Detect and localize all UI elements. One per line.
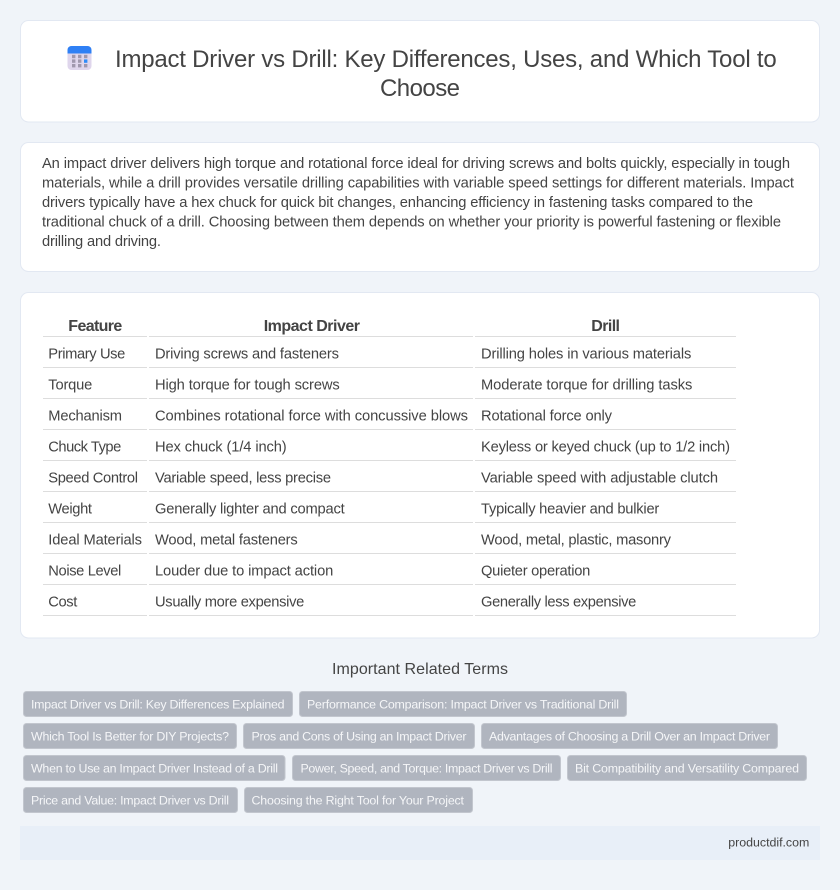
tag: power speed torque (292, 756, 560, 780)
tag: pros and cons: Pros and Cons of Using an Impact Driver (252, 729, 466, 743)
row: ideal materials (43, 532, 736, 554)
row: ideal materials: Ideal Materials (48, 532, 142, 548)
row: primary use (43, 346, 736, 368)
description text (42, 156, 794, 250)
title (115, 46, 777, 102)
row: mechanism (43, 408, 736, 430)
table header row: Feature (68, 318, 122, 335)
tag: diy projects (24, 724, 236, 748)
description text: drivers typically have a hex chuck for quick bit changes, enhancing efficiency in fastening tasks compared to the (42, 195, 753, 211)
tag: pros and cons (244, 724, 474, 748)
panel: related term tags (24, 692, 806, 812)
row: weight: Typically heavier and bulkier (481, 501, 659, 517)
row: mechanism: Combines rotational force with concussive blows (155, 408, 468, 424)
table header row: Drill (591, 318, 620, 335)
tag: advantages: Advantages of Choosing a Drill Over an Impact Driver (489, 729, 770, 743)
row: torque: Torque (48, 377, 92, 393)
tag: when to use (24, 756, 285, 780)
row: weight: Generally lighter and compact (155, 501, 345, 517)
row: weight (43, 501, 736, 523)
tag: advantages (482, 724, 778, 748)
tag: choosing the right tool: Choosing the Right Tool for Your Project (252, 793, 465, 807)
row: speed control: Speed Control (48, 470, 138, 486)
description text: traditional chuck of a drill. Choosing between them depends on whether your priority is powerful fastening or flexible (42, 214, 781, 230)
row: noise level: Quieter operation (481, 563, 590, 579)
panel: comparison table (20, 292, 820, 638)
table header row: Impact Driver (264, 318, 360, 335)
icon: calendar (68, 46, 92, 70)
tag: performance comparison (300, 692, 626, 716)
description text: An impact driver delivers high torque and rotational force ideal for driving screws and bolts quickly, especially in tough (42, 156, 790, 172)
row: chuck type: Chuck Type (48, 439, 121, 455)
title: Choose (380, 75, 460, 102)
row: noise level: Louder due to impact action (155, 563, 333, 579)
tag: performance comparison: Performance Comparison: Impact Driver vs Traditional Drill (307, 697, 619, 711)
tag: price and value: Price and Value: Impact Driver vs Drill (31, 793, 229, 807)
row: torque (43, 377, 736, 399)
row: cost: Usually more expensive (155, 594, 304, 610)
footer: productdif.com (728, 836, 809, 850)
row: chuck type: Hex chuck (1/4 inch) (155, 439, 287, 455)
tag: when to use: When to Use an Impact Driver Instead of a Drill (31, 761, 278, 775)
row: cost: Cost (48, 594, 77, 610)
tag: price and value (24, 788, 238, 812)
panel: description (20, 142, 820, 272)
row: torque: High torque for tough screws (155, 377, 340, 393)
row: primary use: Primary Use (48, 346, 125, 362)
row: speed control: Variable speed, less precise (155, 470, 331, 486)
tag: bit compatibility: Bit Compatibility and Versatility Compared (575, 761, 799, 775)
row: speed control: Variable speed with adjustable clutch (481, 470, 718, 486)
row: ideal materials: Wood, metal fasteners (155, 532, 298, 548)
tag: key differences (24, 692, 292, 716)
row: torque: Moderate torque for drilling tasks (481, 377, 692, 393)
tag: power speed torque: Power, Speed, and Torque: Impact Driver vs Drill (300, 761, 552, 775)
description text: materials, while a drill provides versatile drilling capabilities with variable speed settings for different materials. Impact (42, 176, 794, 192)
table header row (43, 318, 736, 337)
row: mechanism: Mechanism (48, 408, 122, 424)
row: speed control (43, 470, 736, 492)
row: chuck type (43, 439, 736, 461)
row: noise level (43, 563, 736, 585)
footer (20, 826, 820, 860)
row: ideal materials: Wood, metal, plastic, masonry (481, 532, 672, 548)
heading: related terms: Important Related Terms (332, 661, 508, 678)
panel: header (20, 20, 820, 122)
row: noise level: Noise Level (48, 563, 121, 579)
row: chuck type: Keyless or keyed chuck (up to 1/2 inch) (481, 439, 730, 455)
row: primary use: Driving screws and fasteners (155, 346, 339, 362)
description text: drilling and driving. (42, 234, 161, 250)
title: Impact Driver vs Drill: Key Differences, Uses, and Which Tool to (115, 46, 777, 73)
tag: key differences: Impact Driver vs Drill: Key Differences Explained (31, 697, 285, 711)
row: weight: Weight (48, 501, 92, 517)
tag: choosing the right tool (244, 788, 472, 812)
tag: bit compatibility (568, 756, 806, 780)
row: cost: Generally less expensive (481, 594, 636, 610)
row: mechanism: Rotational force only (481, 408, 613, 424)
row: cost (43, 594, 736, 616)
row: primary use: Drilling holes in various materials (481, 346, 691, 362)
tag: diy projects: Which Tool Is Better for DIY Projects? (31, 729, 229, 743)
